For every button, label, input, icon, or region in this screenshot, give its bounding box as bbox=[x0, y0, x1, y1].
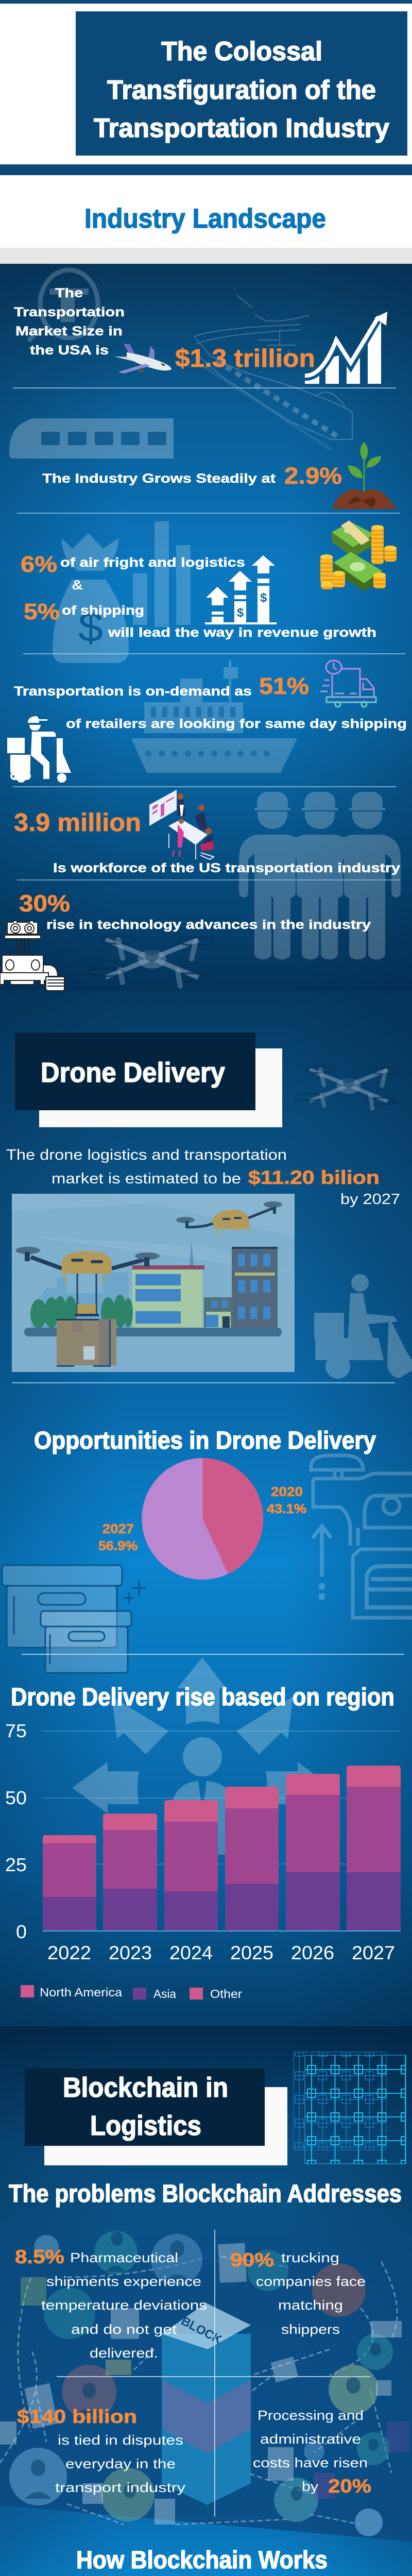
title text: Transportation Industry bbox=[94, 113, 389, 143]
delivery box bbox=[57, 1304, 116, 1367]
legend: Other bbox=[210, 1987, 242, 2001]
divider bbox=[17, 879, 400, 880]
bar: 2025 bbox=[225, 1787, 279, 1931]
market estimate text: market is estimated to be bbox=[52, 1171, 241, 1187]
watermark: people arrows bbox=[72, 1657, 333, 1855]
callout: market size label: Transportation bbox=[14, 305, 125, 319]
legend: Asia bbox=[153, 1987, 176, 2001]
x axis labels: 2027 bbox=[352, 1942, 395, 1963]
label: 2020 bbox=[267, 1485, 306, 1516]
watermark: drone bbox=[88, 936, 213, 986]
icon: rising arrows: $ bbox=[237, 606, 244, 620]
watermark: food drone bbox=[311, 1455, 412, 1618]
statement: workforce: Is workforce of the US transportation industry bbox=[53, 861, 400, 875]
problem: admin costs: by bbox=[302, 2479, 318, 2494]
watermark: drone bbox=[295, 1066, 400, 1109]
market estimate text: $11.20 bilion bbox=[248, 1167, 380, 1188]
heading: blockchain in logistics: Blockchain in bbox=[63, 2072, 228, 2103]
callout: market size label: The bbox=[55, 286, 83, 300]
pie chart bbox=[98, 1458, 306, 1580]
problem: disputes: transport industry bbox=[55, 2480, 185, 2495]
label: 2027: 2027 bbox=[102, 1522, 134, 1536]
stat text: air freight and shipping: 6% bbox=[21, 552, 57, 577]
bar: 2027 bbox=[347, 1766, 401, 1931]
problem: trucking: companies face bbox=[256, 2274, 366, 2289]
watermark: scooter rider bbox=[314, 1274, 412, 1379]
section background: industry landscape bbox=[0, 264, 412, 991]
divider bbox=[13, 786, 396, 787]
heading: how blockchain works: How Blockchain Works bbox=[76, 2547, 328, 2574]
legend bbox=[21, 1985, 242, 2001]
watermark: cargo ship bbox=[131, 660, 297, 773]
watermark: magnifier bbox=[28, 270, 98, 341]
central block tower: BLOCK bbox=[179, 2314, 225, 2347]
stat text: air freight and shipping: will lead the way in revenue growth bbox=[108, 625, 376, 640]
problem: pharmaceutical: 8.5% bbox=[15, 2246, 64, 2267]
divider bbox=[17, 513, 400, 514]
label: 2020: 43.1% bbox=[267, 1502, 306, 1516]
heading: drone delivery: Drone Delivery bbox=[41, 1057, 225, 1088]
statement: retailers same day: of retailers are looking for same day shipping bbox=[66, 717, 407, 731]
title text: Transfiguration of the bbox=[107, 75, 376, 105]
watermark: boxes bbox=[2, 1565, 146, 1673]
problem: pharmaceutical: delivered. bbox=[90, 2345, 158, 2361]
stat: 30 percent: 30% bbox=[19, 890, 70, 917]
stacked bar chart bbox=[5, 1720, 401, 2001]
label: 2020: 2020 bbox=[271, 1485, 303, 1499]
section background: blockchain bbox=[0, 2026, 412, 2576]
central block tower bbox=[162, 2303, 251, 2505]
stat text: air freight and shipping: & bbox=[72, 577, 83, 592]
documents bbox=[0, 2243, 409, 2524]
heading: blockchain in logistics bbox=[63, 2072, 228, 2141]
statement: industry grows: The Industry Grows Steadily at bbox=[42, 471, 276, 486]
grey strip bbox=[0, 248, 412, 264]
slice: 2027 bbox=[142, 1458, 228, 1580]
problem: admin costs: 20% bbox=[328, 2476, 371, 2497]
market estimate text: by 2027 bbox=[340, 1191, 400, 1208]
skyline bbox=[31, 1273, 129, 1328]
icon: rising arrows bbox=[205, 555, 277, 624]
slice: 2020 bbox=[203, 1458, 263, 1574]
statement: technology: rise in technology advances in the industry bbox=[46, 918, 371, 932]
label: 2027 bbox=[98, 1522, 138, 1553]
market estimate text: The drone logistics and transportation bbox=[6, 1147, 287, 1163]
watermark: bars bbox=[133, 521, 191, 627]
top bar bbox=[0, 0, 412, 4]
building: middle bbox=[132, 1242, 204, 1328]
y axis labels: 25 bbox=[5, 1854, 27, 1875]
market estimate text bbox=[6, 1147, 400, 1208]
problem: disputes: $140 billion bbox=[17, 2406, 137, 2427]
building: tall bbox=[232, 1247, 278, 1328]
stat: 51 percent: 51% bbox=[259, 673, 309, 699]
ground bbox=[24, 1328, 282, 1336]
y axis labels: 50 bbox=[5, 1787, 27, 1808]
section background: drone delivery bbox=[0, 991, 412, 2026]
divider bbox=[12, 1382, 395, 1383]
problem: pharmaceutical bbox=[15, 2246, 207, 2361]
problem: admin costs bbox=[253, 2408, 371, 2497]
divider bar bbox=[0, 164, 412, 175]
panel: drone delivery header bbox=[15, 1032, 282, 1127]
heading: opportunities: Opportunities in Drone Delivery bbox=[34, 1427, 376, 1454]
illustration: drone delivering box bbox=[12, 1194, 295, 1372]
small drone bbox=[176, 1201, 282, 1238]
divider bbox=[23, 653, 406, 654]
icon: airplane bbox=[114, 344, 171, 374]
watermark: workers bbox=[239, 792, 401, 959]
stat: 2.9 percent: 2.9% bbox=[284, 463, 342, 489]
stat text: air freight and shipping: of air fright and logistics bbox=[60, 555, 245, 570]
problem: trucking: 90% bbox=[230, 2249, 274, 2270]
problem: admin costs: administrative bbox=[260, 2431, 361, 2447]
problem: pharmaceutical: and do not get bbox=[71, 2321, 177, 2337]
divider bbox=[13, 387, 396, 388]
graphic: blockchain network grid bbox=[294, 2052, 406, 2164]
problem: pharmaceutical: temperature deviations bbox=[41, 2297, 207, 2313]
bar: 2024 bbox=[164, 1800, 218, 1931]
problem: trucking bbox=[230, 2249, 366, 2337]
stat: 3.9 million: 3.9 million bbox=[14, 809, 141, 837]
problem: trucking: trucking bbox=[281, 2250, 339, 2265]
callout: market size label bbox=[14, 286, 125, 358]
icon: growth chart bbox=[305, 312, 387, 384]
watermark: money bag bbox=[53, 533, 129, 663]
dividers: cross bbox=[57, 2230, 370, 2517]
x axis labels: 2024 bbox=[169, 1942, 213, 1963]
x axis labels: 2026 bbox=[291, 1942, 334, 1963]
stat text: air freight and shipping: of shipping bbox=[62, 603, 144, 618]
heading: blockchain in logistics: Logistics bbox=[90, 2110, 201, 2141]
stat text: air freight and shipping: 5% bbox=[24, 599, 60, 624]
panel: blockchain header bbox=[25, 2069, 287, 2165]
trees bbox=[30, 1295, 133, 1328]
title panel bbox=[76, 11, 407, 156]
building: small bbox=[204, 1297, 233, 1328]
legend: North America bbox=[40, 1986, 122, 1999]
problem: disputes: is tied in disputes bbox=[58, 2432, 183, 2448]
icon: delivery truck bbox=[320, 660, 376, 707]
callout: market size label: Market Size in bbox=[15, 324, 123, 338]
problem: disputes: everyday in the bbox=[65, 2456, 176, 2471]
axis line bbox=[43, 1930, 401, 1931]
illustration: business team bbox=[149, 790, 214, 859]
problem: admin costs: costs have risen bbox=[253, 2455, 368, 2470]
x axis labels: 2023 bbox=[109, 1942, 152, 1963]
statement: on-demand: Transportation is on-demand as bbox=[14, 684, 252, 699]
large drone bbox=[15, 1247, 160, 1316]
problem: pharmaceutical: Pharmaceutical bbox=[70, 2250, 178, 2265]
avatars bbox=[9, 2231, 393, 2536]
y axis labels: 0 bbox=[16, 1921, 27, 1942]
stat: 1.3 trillion: $1.3 trillion bbox=[175, 345, 315, 372]
connecting dashed lines bbox=[0, 2257, 397, 2524]
y axis labels: 75 bbox=[5, 1720, 27, 1741]
label: 2027: 56.9% bbox=[98, 1539, 138, 1553]
x axis labels bbox=[47, 1942, 395, 1963]
x axis labels: 2025 bbox=[230, 1942, 273, 1963]
icon: rising arrows: $ bbox=[260, 591, 267, 605]
divider bbox=[22, 1654, 404, 1655]
problem: trucking: matching bbox=[278, 2297, 343, 2313]
icon: money and coins bbox=[320, 520, 397, 591]
bar: 2023 bbox=[103, 1814, 157, 1931]
background: people network bbox=[0, 2205, 412, 2541]
icon: robot bbox=[0, 921, 64, 991]
x axis labels: 2022 bbox=[47, 1942, 91, 1963]
bar: 2026 bbox=[286, 1774, 340, 1931]
callout: market size label: the USA is bbox=[30, 343, 109, 358]
y axis labels bbox=[5, 1720, 27, 1942]
problem: disputes bbox=[17, 2406, 185, 2495]
problem: pharmaceutical: shipments experience bbox=[46, 2274, 201, 2289]
title text: The Colossal bbox=[161, 37, 322, 66]
icon: plant sprout bbox=[332, 442, 397, 509]
icon: delivery rider bbox=[7, 716, 71, 783]
heading: industry landscape: Industry Landscape bbox=[84, 204, 326, 234]
problem: trucking: shippers bbox=[281, 2321, 340, 2337]
title text bbox=[94, 37, 389, 143]
stat text: air freight and shipping bbox=[21, 552, 376, 640]
watermark: bullet train bbox=[9, 418, 174, 459]
problem: admin costs: Processing and bbox=[258, 2408, 364, 2423]
gridlines bbox=[42, 1731, 400, 1864]
watermark: train sketch bbox=[194, 295, 352, 450]
watermark: dollar sign: $ bbox=[78, 604, 103, 651]
bar: 2022 bbox=[43, 1835, 96, 1931]
